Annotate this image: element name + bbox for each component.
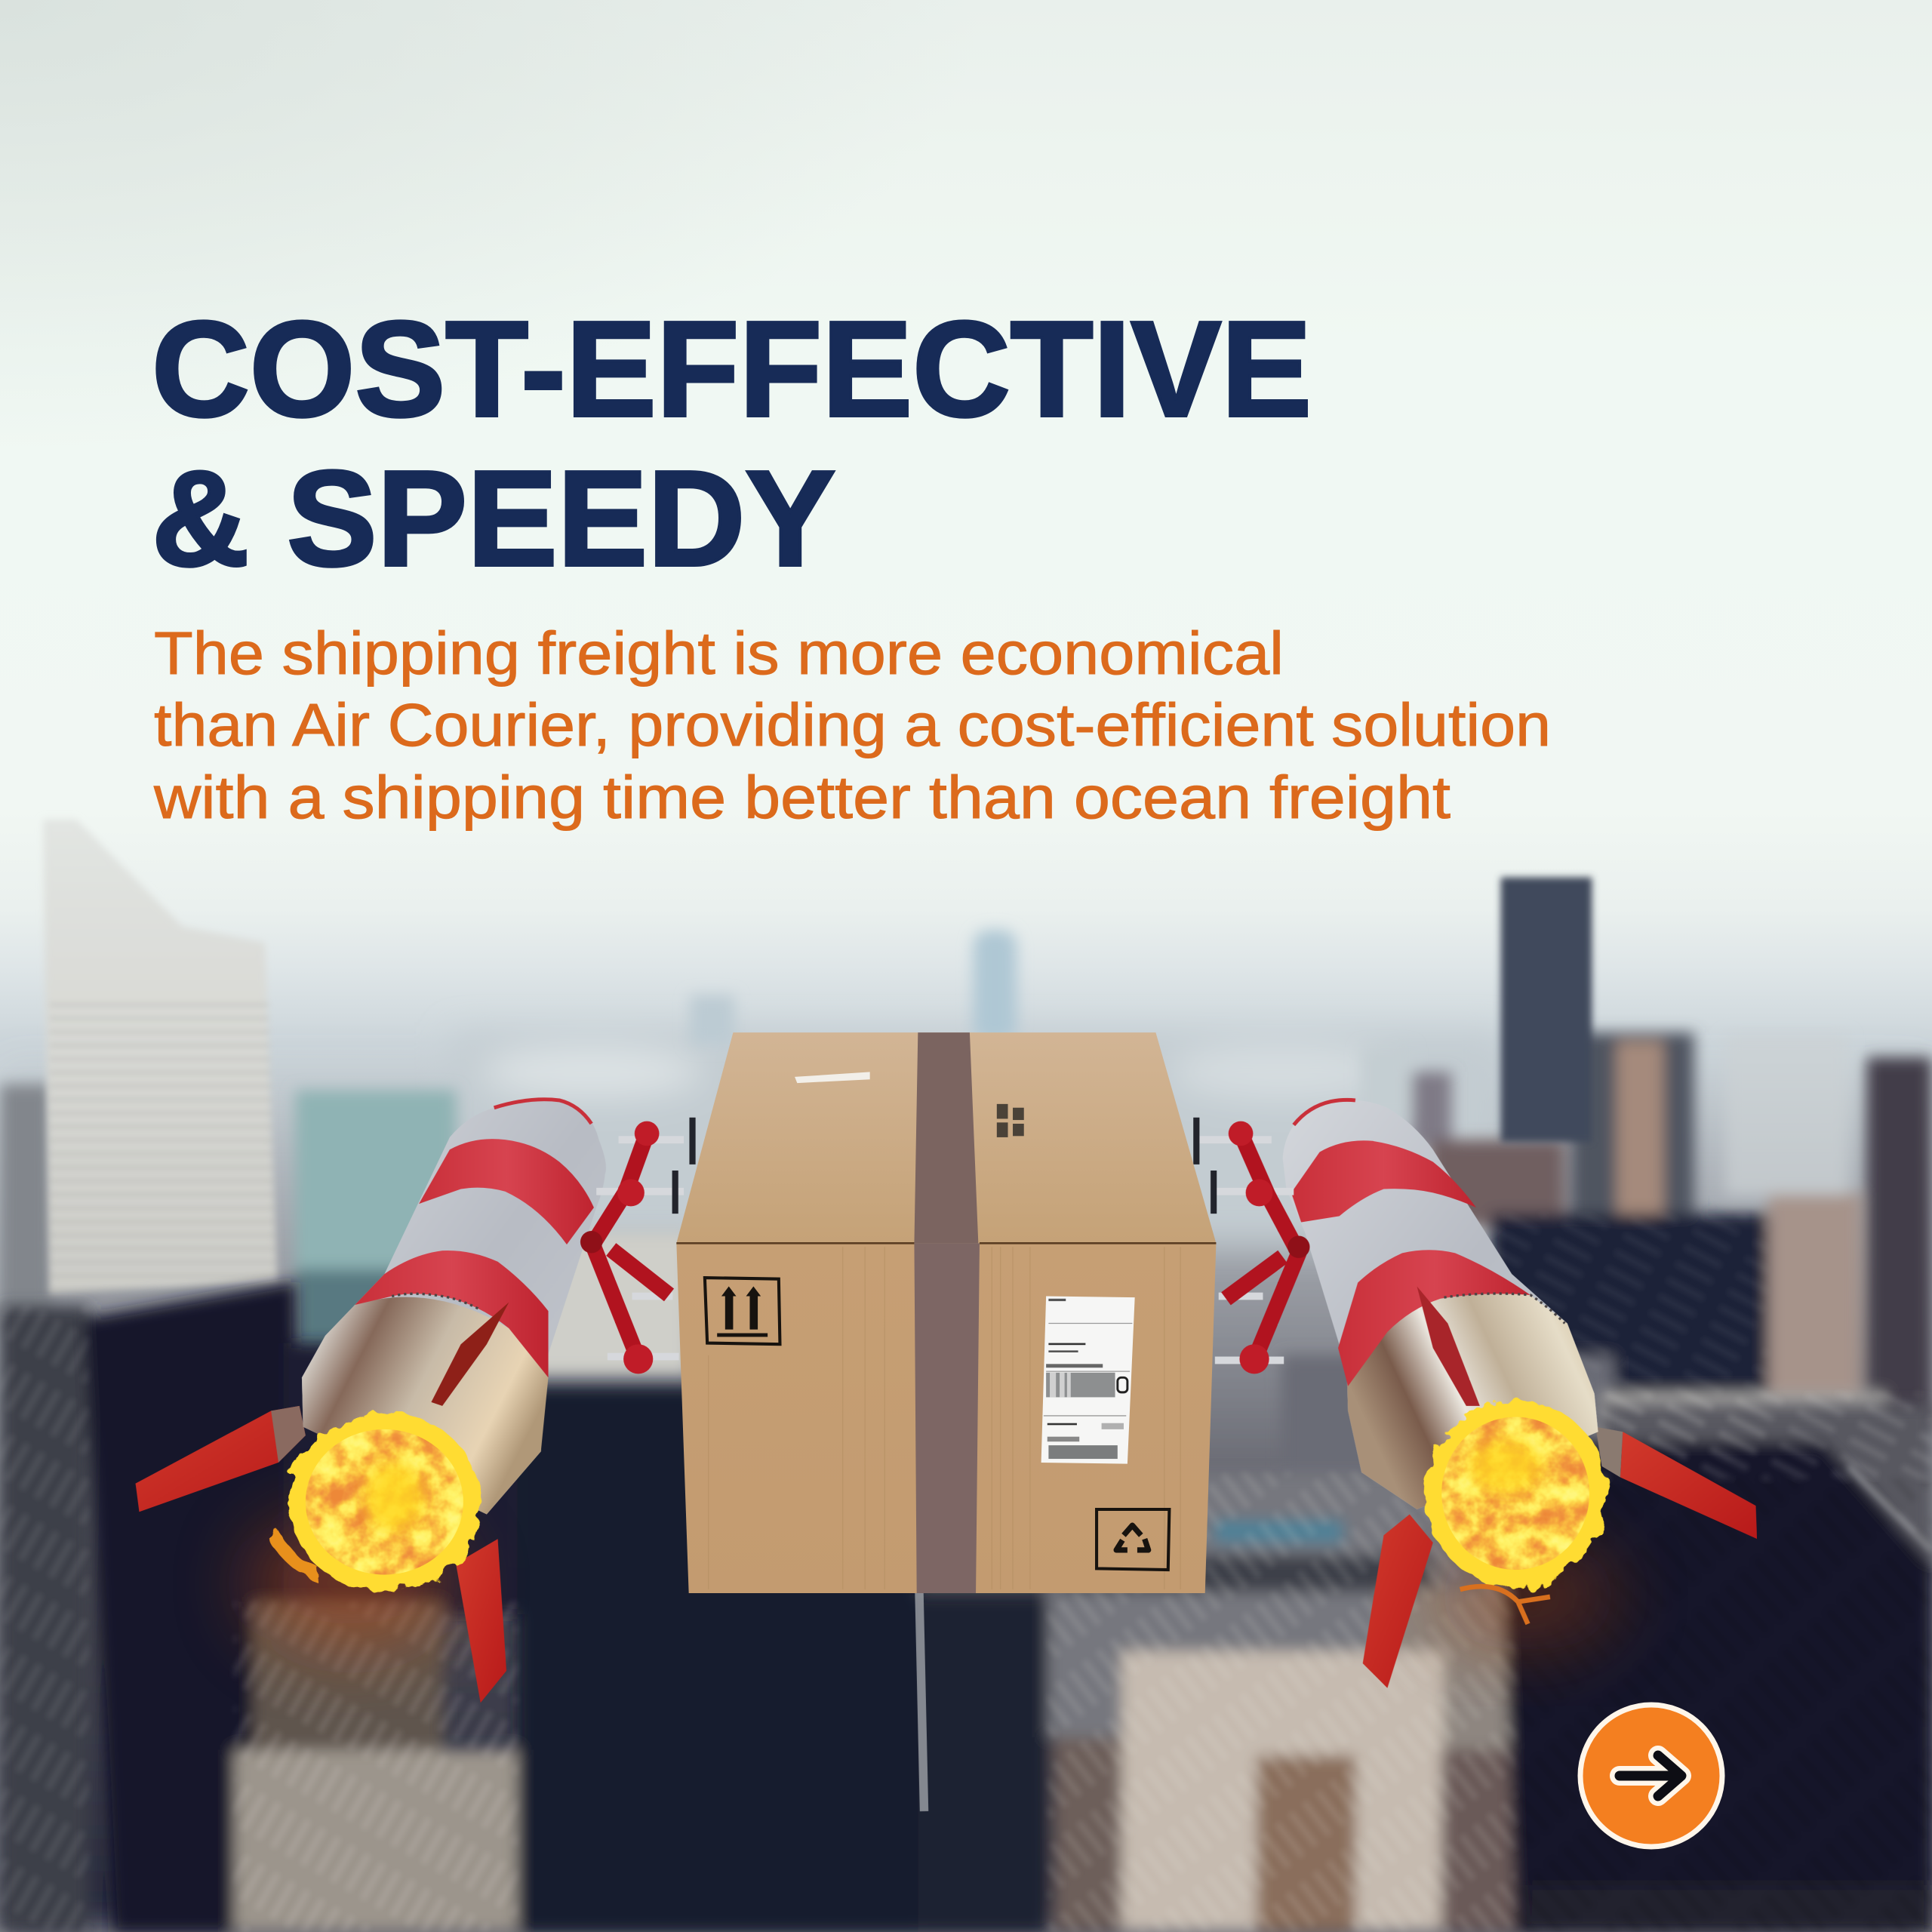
small fin: left xyxy=(431,1303,509,1406)
next arrow button xyxy=(1580,1705,1722,1847)
body text: The shipping freight is more economical xyxy=(154,620,1284,687)
nozzle: left xyxy=(302,1297,549,1515)
title: COST-EFFECTIVE xyxy=(152,294,1312,445)
box top face xyxy=(676,1032,1216,1243)
rivet line: right xyxy=(1444,1294,1564,1323)
red band lower: left xyxy=(355,1251,549,1377)
title xyxy=(152,294,1312,595)
icon: this way up xyxy=(705,1278,780,1344)
rocket body: right xyxy=(1283,1100,1598,1509)
flame glow: left xyxy=(247,1515,456,1651)
red nose stripe: left xyxy=(494,1100,592,1124)
radial motion streaks xyxy=(0,1214,1932,1932)
body text xyxy=(153,620,1551,831)
lit diagonal edge, lower right xyxy=(1848,1466,1932,1550)
bracket: left xyxy=(580,1118,693,1374)
rivet line: left xyxy=(392,1294,478,1309)
packing tape: front xyxy=(914,1243,980,1593)
cardboard corrugation lines xyxy=(709,1247,1180,1589)
fin: right lower xyxy=(1363,1515,1433,1688)
background: blurred city skyline xyxy=(0,820,1932,1932)
rocket body: left xyxy=(302,1100,606,1515)
torn white tag on lid xyxy=(795,1072,870,1083)
bracket: right xyxy=(1196,1118,1310,1374)
thin pole below box xyxy=(919,1592,924,1811)
flame core: left xyxy=(306,1429,463,1575)
building floor lines xyxy=(49,998,277,1294)
flame core: right xyxy=(1441,1417,1589,1570)
rocket: left xyxy=(136,1100,693,1703)
flame: left xyxy=(273,1412,481,1592)
packing tape: top xyxy=(914,1032,978,1243)
box front face xyxy=(676,1243,1216,1593)
title: & SPEEDY xyxy=(152,443,835,595)
rocket: right xyxy=(1196,1100,1757,1688)
red nose stripe: right xyxy=(1294,1100,1355,1125)
body text: with a shipping time better than ocean freight xyxy=(153,764,1451,831)
flame glow: right xyxy=(1435,1540,1620,1651)
fin: right outer xyxy=(1595,1427,1757,1539)
red band upper: left xyxy=(419,1139,594,1244)
red band lower: right xyxy=(1338,1250,1531,1386)
dark marks on lid xyxy=(997,1104,1024,1137)
shipping label xyxy=(1041,1297,1135,1464)
flame hot centre: left xyxy=(365,1463,424,1531)
small fin: right xyxy=(1417,1286,1480,1406)
box edge shadow xyxy=(676,1242,1216,1244)
cardboard box xyxy=(676,1032,1216,1593)
flame sparks: right xyxy=(1460,1586,1550,1624)
red band upper: right xyxy=(1291,1140,1476,1223)
flame: right xyxy=(1424,1400,1607,1587)
nozzle: right xyxy=(1346,1294,1598,1509)
flame hot centre: right xyxy=(1469,1439,1543,1494)
icon: recycling xyxy=(1097,1509,1169,1570)
fin: left lower xyxy=(456,1539,506,1703)
body text: than Air Courier, providing a cost-efficient solution xyxy=(154,691,1551,758)
fin: left outer xyxy=(136,1406,306,1512)
